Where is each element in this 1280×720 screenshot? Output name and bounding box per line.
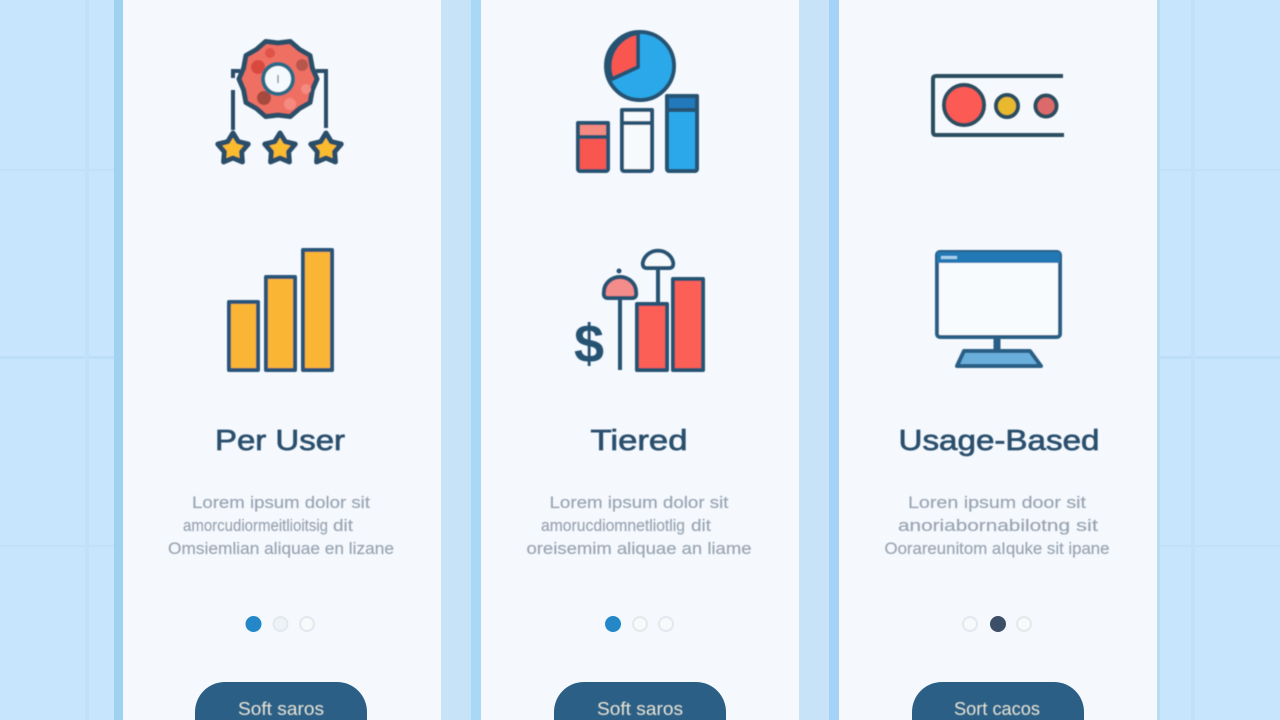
description: [168, 493, 394, 558]
heading: Usage-Based: [898, 425, 1100, 457]
button: Sort cacos: [954, 699, 1040, 719]
heading: Per User: [215, 425, 345, 457]
button: [195, 682, 367, 720]
pagination dots: [605, 616, 673, 632]
panel: Per User: [123, 0, 441, 720]
button: [554, 682, 726, 720]
description: Lorem ipsum dolor sit: [192, 493, 370, 512]
description: dit: [333, 516, 353, 535]
panel: Tiered: [481, 0, 799, 720]
heading: Tiered: [590, 425, 688, 457]
icon: desktop monitor: [937, 252, 1060, 366]
description: oreisemim aliquae an liame: [526, 539, 752, 558]
description: amorcudiormeitlioitsig: [183, 516, 328, 535]
description: sit: [1076, 516, 1098, 535]
button: Soft saros: [238, 699, 324, 719]
description: [526, 493, 752, 558]
button: [912, 682, 1084, 720]
icon: gear with three stars: [218, 42, 341, 162]
icon: dollar and cloche bars: [574, 251, 703, 374]
button: Soft saros: [597, 699, 683, 719]
description: dit: [691, 516, 711, 535]
icon: pie chart with bars: [578, 32, 697, 171]
pagination dots: [963, 616, 1031, 632]
description: Lorem ipsum dolor sit: [550, 493, 729, 512]
description: amorucdiomnetliotlig: [541, 516, 685, 535]
description: Loren ipsum door sit: [908, 493, 1086, 512]
pagination dots: [246, 616, 314, 632]
description: Oorareunitom aIquke sit ipane: [884, 539, 1110, 558]
description: Omsiemlian aliquae en lizane: [168, 539, 394, 558]
description: anoriabornabilotng: [898, 516, 1070, 535]
description: [884, 493, 1110, 558]
icon: rising bar chart: [229, 250, 332, 370]
panel: Usage-Based: [839, 0, 1157, 720]
icon: dollar and cloche bars: $: [574, 314, 604, 374]
icon: meter with three circles: [933, 76, 1064, 135]
